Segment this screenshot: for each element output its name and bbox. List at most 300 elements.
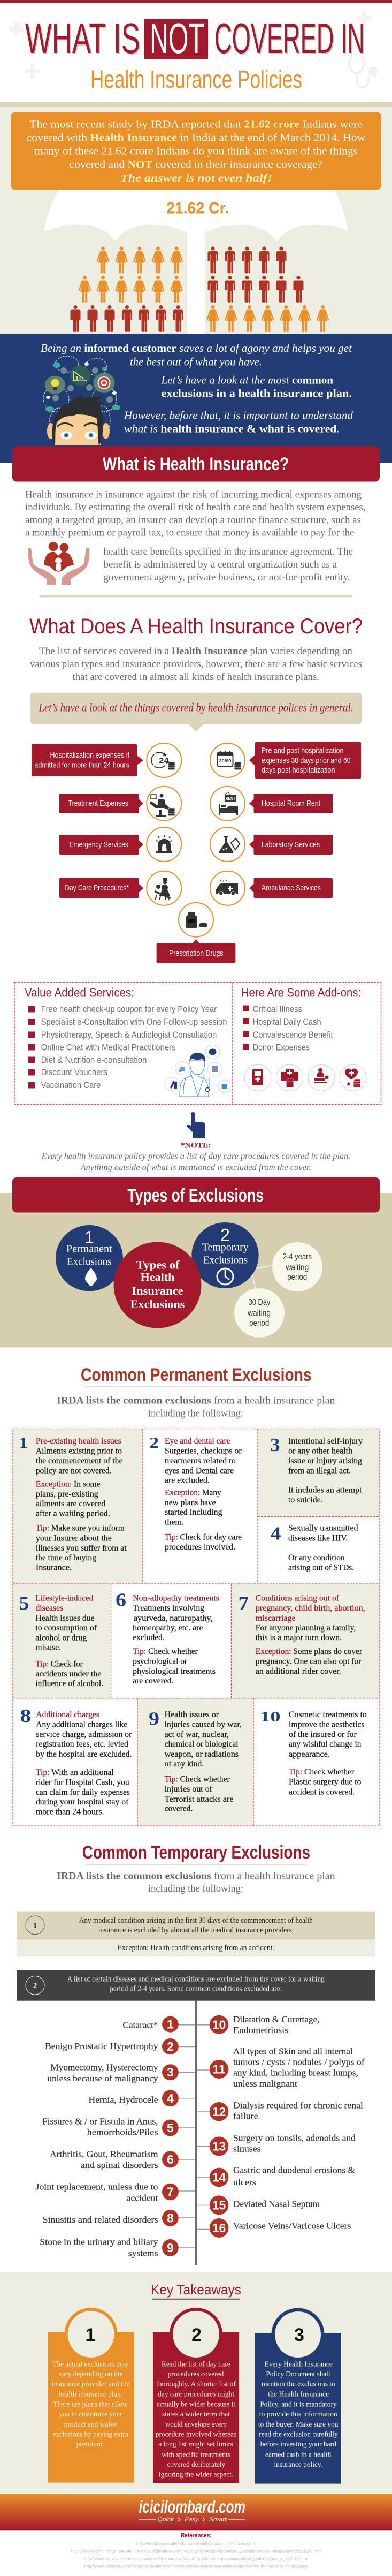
cell 6: non-allopathy treatments: physiological treatments [133, 1667, 216, 1676]
list: left conditions 1-9: hemorrhoids/Piles [87, 2127, 158, 2137]
references: http://www.moneycontrol.com/news/health-insurance/avoid-troublehealth-insurance-check-your-exclusions_767211.html [84, 2556, 308, 2561]
cell 5: lifestyle-induced diseases: to consumption of [35, 1623, 97, 1633]
list: left conditions 1-9: 7 [167, 2185, 174, 2199]
icon: ambulance [210, 871, 245, 905]
cell 8: additional charges: Additional charges [36, 1710, 99, 1719]
cell 7: pregnancy conditions: 7 [239, 1593, 249, 1614]
icon: day care people [147, 871, 181, 905]
cell 7: pregnancy conditions: pregnancy. One can also opt for [256, 1657, 362, 1666]
takeaway card 2: a long list might set limits [158, 2441, 233, 2449]
item: Prescription Drugs [157, 939, 235, 963]
band and background of intro section [0, 102, 392, 334]
cell 1: pre-existing health issues: 1 [19, 1435, 28, 1452]
cell 5: lifestyle-induced diseases [19, 1593, 103, 1688]
takeaway card 3: Policy, and it is mandatory [260, 2401, 337, 2408]
takeaway card 2: procedures covered [168, 2370, 224, 2378]
cell 7: pregnancy conditions: For anyone planning a family, [256, 1623, 356, 1633]
cell 4: sexually transmitted diseases: diseases like HIV. [288, 1533, 348, 1543]
text block: list of services: The list of services covered in a Health Insurance plan varies depending on [39, 646, 352, 657]
cell 2: eye and dental care: Exception: Many [165, 1488, 221, 1497]
oval: 2-4 years waiting period: 2-4 years [283, 1252, 312, 1261]
oval: 2-4 years waiting period: waiting [285, 1263, 309, 1272]
list: value added services: Free health check-up coupon for every Policy Year [41, 1004, 217, 1014]
cell 1: pre-existing health issues: your Insurer about the [36, 1533, 112, 1543]
icon: room rent bed: RENT [226, 796, 235, 801]
takeaway card 2: day care procedures might [158, 2390, 234, 2398]
text block: list of services [30, 646, 362, 683]
timeline axis [195, 2001, 197, 2265]
list: left conditions 1-9: and spinal disorders [81, 2160, 158, 2170]
list: add-ons [243, 1004, 333, 1053]
cell 6: non-allopathy treatments: Tip: Check whether [133, 1647, 198, 1656]
cell 2: eye and dental care: eyes and Dental care [165, 1466, 234, 1475]
takeaway card 3: Policy Document shall [266, 2370, 330, 2378]
panel: value added services and add-ons [14, 983, 381, 1104]
list: left conditions 1-9: Hernia, Hydrocele [89, 2095, 158, 2105]
takeaway card 1: 1 [86, 2325, 95, 2345]
cell 7: pregnancy conditions: Conditions arising out of [256, 1594, 340, 1603]
callout: things covered [30, 693, 362, 731]
circle: permanent exclusions: Exclusions [67, 1256, 112, 1268]
takeaway card 2: states a wider term that [162, 2411, 230, 2419]
list: left conditions 1-9: systems [128, 2248, 158, 2258]
cell 5: lifestyle-induced diseases: accidents under the [35, 1670, 101, 1679]
cell 3: intentional self-injury [270, 1434, 363, 1505]
cell 2: eye and dental care: Surgeries, checkups or [165, 1447, 242, 1455]
cell 10: cosmetic treatments: Plastic surgery due to [289, 1778, 362, 1787]
cell 10: cosmetic treatments: any wishful change in [289, 1740, 362, 1749]
list: right conditions 10-16: 15 [212, 2199, 226, 2212]
list: value added services: Online Chat with Medical Practitioners [41, 1042, 176, 1053]
panel: permanent exclusion grid backgrounds [13, 1429, 380, 1826]
cell 10: cosmetic treatments: 10 [260, 1709, 280, 1725]
takeaway card 3: the Health Insurance [268, 2390, 329, 2398]
cell 1: pre-existing health issues: Insurance. [36, 1563, 72, 1573]
list: value added services: Discount Vouchers [41, 1067, 107, 1077]
panel: waiting period list header [17, 1970, 375, 2001]
oval: 30 day waiting period: waiting [247, 1309, 271, 1318]
panel: waiting period list header: 2 [33, 1982, 37, 1990]
takeaway card 1 [48, 2308, 134, 2483]
footer banner [0, 2494, 392, 2530]
takeaway card 1: vary depending on the [58, 2370, 123, 2378]
cell 8: additional charges: during your hospital stay of [36, 1797, 129, 1807]
item: Laboratory Services [249, 835, 333, 855]
cell 1: pre-existing health issues: policy are not covered. [36, 1466, 112, 1475]
callout: study: covered and NOT covered in their insurance coverage? [70, 158, 322, 170]
cell 9: war and radiation: Health issues or [165, 1710, 219, 1719]
panel: informed customer [0, 334, 392, 463]
heading: Types of Exclusions: Types of Exclusions [127, 1185, 264, 1206]
cell 2: eye and dental care: are excluded. [165, 1476, 210, 1485]
illustration: doctor [165, 1045, 230, 1097]
circle: temporary exclusions: 2 [220, 1226, 230, 1245]
list: right conditions 10-16: any kind, including breast lumps, [233, 2068, 358, 2078]
footer banner: Easy [185, 2517, 199, 2523]
note [41, 1142, 350, 1173]
panel: waiting period list header: A list of certain diseases and medical conditions are excluded from the cover for a waiting [67, 1975, 325, 1984]
list: left conditions 1-9: Joint replacement, unless due to [35, 2182, 158, 2192]
circle: temporary exclusions: Exclusions [203, 1254, 248, 1266]
takeaway card 3: before investing your hard [260, 2441, 336, 2449]
people: right group [206, 246, 329, 332]
list: left conditions 1-9: Stone in the urinary and biliary [40, 2237, 158, 2247]
footer banner: Smart [209, 2517, 227, 2523]
list: right conditions 10-16: All types of Skin and all internal [233, 2046, 353, 2057]
cell 10: cosmetic treatments: improve the aesthetics [289, 1720, 365, 1729]
icon: laboratory flask [210, 827, 245, 862]
list: left conditions 1-9: 2 [167, 2039, 174, 2053]
intro text on blue: Being an informed customer saves a lot of agony and helps you get [41, 342, 352, 354]
illustration: thinking man [43, 356, 120, 447]
item: Day Care Procedures: Day Care Procedures* [65, 883, 129, 893]
intro text on blue: the best out of what you have. [130, 356, 262, 368]
references: http://health.howstuffworks.com/health-insurance/exclusion.htm [136, 2541, 256, 2547]
takeaway card 3: read the exclusion carefully [259, 2431, 338, 2438]
title: WHAT IS [26, 16, 141, 63]
callout: study: The answer is not even half! [120, 172, 272, 184]
list: value added services: Diet & Nutrition e-consultation [41, 1055, 147, 1065]
top red bar [0, 0, 392, 3]
takeaway card 3: mention the exclusions to [262, 2381, 335, 2389]
circle: types of health insurance exclusions: Health [141, 1270, 174, 1284]
item: Hospitalization expenses: admitted for more than 24 hours [34, 761, 129, 770]
takeaway card 2: with specific treatments [162, 2451, 230, 2459]
stat: 21.62 Cr.: 21.62 Cr. [166, 200, 229, 217]
list: right conditions 10-16: 13 [212, 2140, 226, 2154]
intro text on blue [41, 342, 353, 435]
cell 2: eye and dental care [149, 1435, 242, 1552]
list: left conditions 1-9: Arthritis, Gout, Rheumatism [50, 2149, 158, 2159]
item: Treatment Expenses: Treatment Expenses [68, 799, 128, 808]
takeaway card 1: exclusions by paying extra [53, 2431, 129, 2438]
item: Pre and post hospitalization: expenses 30 days prior and 60 [262, 756, 351, 765]
text block: health insurance definition: individuals. By estimating the overall risk of health care and health system expenses, [25, 502, 366, 513]
note: Anything outside of what is mentioned is excluded from the cover. [80, 1162, 311, 1173]
heading: Key Takeaways: Key Takeaways [151, 2282, 241, 2298]
list: left conditions 1-9: 8 [167, 2211, 174, 2225]
cell 4: sexually transmitted diseases: Sexually transmitted [288, 1524, 358, 1533]
item: Emergency Services: Emergency Services [70, 840, 128, 849]
oval: 2-4 years waiting period [272, 1242, 322, 1291]
takeaway card 2 [153, 2308, 239, 2483]
circle: types of health insurance exclusions: Insurance [132, 1284, 183, 1297]
panel: key takeaways background [0, 2272, 392, 2493]
note: Every health insurance policy provides a list of day care procedures covered in the plan. [41, 1151, 350, 1161]
list: right conditions 10-16: Dialysis required for chronic renal [233, 2100, 363, 2110]
divider [40, 595, 352, 598]
intro text on blue: However, before that, it is important to understand [124, 409, 353, 421]
list: left conditions 1-9: Cataract* [123, 2020, 158, 2030]
heading: Types of Exclusions [12, 1177, 380, 1212]
takeaway card 2: 2 [191, 2325, 202, 2345]
title: WHAT IS [25, 14, 140, 62]
text block: health insurance definition: government agency, private business, or not-for-profit entity. [104, 572, 350, 583]
circle: temporary exclusions: Temporary [202, 1242, 249, 1253]
connector lines [252, 1265, 274, 1289]
cell 8: additional charges: more than 24 hours. [36, 1808, 104, 1817]
panel: first 30 days exclusion: Exception: Health conditions arising from an accident. [118, 1944, 274, 1952]
footer banner: Quick [157, 2517, 174, 2523]
list: add-ons: Convalescence Benefit [253, 1030, 333, 1040]
cell 6: non-allopathy treatments [116, 1590, 219, 1686]
icons: add-ons [244, 1064, 366, 1091]
list: right conditions 10-16: failure [233, 2111, 258, 2121]
text block: health insurance definition: Health insurance is insurance against the risk of incurring medical expenses among [25, 489, 362, 500]
references [71, 2533, 321, 2569]
list: value added services [28, 1004, 227, 1090]
cell 10: cosmetic treatments: accident is covered. [289, 1787, 355, 1796]
cell 5: lifestyle-induced diseases: Health issues due [35, 1614, 95, 1623]
cell 9: war and radiation: chemical or biological [165, 1740, 239, 1749]
cell 4: sexually transmitted diseases: 4 [271, 1523, 281, 1544]
grid dashed lines [13, 1429, 380, 1826]
icon: family in hands [28, 542, 89, 585]
list: right conditions 10-16: unless malignant [233, 2079, 297, 2089]
icon: treatment chair [147, 787, 181, 821]
cell 9: war and radiation: act of war, nuclear, [165, 1730, 229, 1739]
list: left conditions 1-9: Myomectomy, Hysterectomy [50, 2063, 158, 2073]
text block: IRDA lists temporary: including the following: [148, 1883, 243, 1894]
cell 1: pre-existing health issues: the commencement of the [36, 1456, 123, 1465]
takeaway card 2: would envelope every [165, 2421, 227, 2429]
cell 9: war and radiation [149, 1708, 242, 1814]
takeaway card 2: ignoring the wider aspect. [159, 2471, 233, 2479]
list: right conditions 10-16 [210, 2014, 365, 2238]
cell 1: pre-existing health issues: Exception: In some [36, 1479, 101, 1489]
list: right conditions 10-16: 14 [212, 2171, 226, 2185]
cell 6: non-allopathy treatments: 6 [116, 1590, 126, 1611]
cell 9: war and radiation: injuries caused by war, [165, 1720, 242, 1729]
cell 4: sexually transmitted diseases: arising out of STDs. [288, 1563, 354, 1573]
takeaway card 3: insurance policy. [274, 2461, 322, 2469]
list: left conditions 1-9: 3 [167, 2065, 174, 2079]
panel: first 30 days exclusion: 1 [33, 1921, 37, 1930]
cell 5: lifestyle-induced diseases: alcohol or drug [35, 1633, 87, 1643]
takeaway card 2: procedure involved whereas [156, 2431, 236, 2438]
cell 2: eye and dental care: procedures involved. [165, 1543, 235, 1552]
cell 9: war and radiation: injuries out of [165, 1785, 213, 1794]
item: Prescription Drugs: Prescription Drugs [169, 949, 224, 958]
item: Hospitalization expenses [32, 744, 143, 776]
list: right conditions 10-16: Deviated Nasal Septum [233, 2199, 320, 2209]
icon: pointing hand [187, 1112, 205, 1138]
cell 1: pre-existing health issues: Pre-existing health issues [36, 1437, 121, 1446]
references: http://www.icicibank.com/Personal-Banking/insurance/general-insurance/health-insurance/health-insurance-claims.page [84, 2563, 308, 2569]
list: right conditions 10-16: Dilatation & Curettage, [233, 2014, 320, 2024]
list: right conditions 10-16: Endometriosis [233, 2025, 288, 2035]
cell 1: pre-existing health issues: the time of buying [36, 1553, 96, 1562]
cell 3: intentional self-injury: to suicide. [288, 1495, 323, 1505]
takeaway card 3: to the buyer. Make sure you [258, 2421, 338, 2429]
heading: value added services: Value Added Services: [25, 985, 134, 999]
heading: What is Health Insurance?: What is Health Insurance? [103, 454, 289, 474]
text block: health insurance definition: among a targeted group, an insurer can develop a routine finance structure, such as [25, 515, 361, 526]
cell 1: pre-existing health issues: plans, pre-existing [36, 1490, 98, 1499]
cell 6: non-allopathy treatments: Non-allopathy treatments [133, 1594, 219, 1603]
cell 3: intentional self-injury: from an illegal act. [288, 1466, 351, 1475]
intro text on blue: what is health insurance & what is covered . [124, 422, 340, 435]
heading: add-ons: Here Are Some Add-ons: [241, 985, 361, 999]
subtitle: Health Insurance Policies [90, 65, 302, 93]
list: left conditions 1-9: Benign Prostatic Hypertrophy [45, 2041, 158, 2051]
list: right conditions 10-16: 11 [212, 2063, 226, 2076]
takeaway card 2: Read the list of day care [162, 2360, 230, 2368]
icon: room rent bed [210, 787, 245, 821]
cell 10: cosmetic treatments: appearance. [289, 1750, 330, 1759]
text block: IRDA lists permanent [57, 1395, 335, 1419]
list: right conditions 10-16: Gastric and duodenal erosions & [233, 2165, 355, 2175]
cell 9: war and radiation: of any kind. [165, 1759, 204, 1769]
text block: IRDA lists temporary: IRDA lists the common exclusions from a health insurance plan [57, 1871, 335, 1882]
cell 8: additional charges: Any additional charges like [36, 1720, 127, 1729]
icon: 30/60 calendar [210, 743, 245, 777]
cell 10: cosmetic treatments: Cosmetic treatments to [289, 1710, 367, 1719]
list: value added services: Physiotherapy, Speech & Audiologist Consultation [41, 1030, 217, 1040]
oval: 30 day waiting period: period [249, 1319, 269, 1328]
item: Hospitalization expenses: Hospitalization expenses if [50, 751, 130, 760]
cell 1: pre-existing health issues: illnesses you suffer from at [36, 1544, 127, 1553]
takeaway card 2: actually be wider because it [157, 2401, 235, 2408]
list: right conditions 10-16: sinuses [233, 2144, 261, 2154]
references: References: [181, 2533, 212, 2539]
cell 8: additional charges: Tip: With an additional [36, 1768, 114, 1777]
circle: permanent exclusions [56, 1225, 123, 1291]
callout: study [11, 112, 381, 190]
takeaway card 3: earned cash in a health [265, 2451, 331, 2459]
cell 4: sexually transmitted diseases [271, 1523, 358, 1573]
decorative header icons [9, 11, 376, 87]
oval: 30 day waiting period: 30 Day [249, 1298, 271, 1307]
takeaway card 3: to provide this information [259, 2411, 337, 2419]
cell 5: lifestyle-induced diseases: influence of alcohol. [35, 1679, 103, 1688]
timeline connectors [178, 2025, 210, 2248]
list: left conditions 1-9: 4 [167, 2091, 174, 2105]
circle: types of health insurance exclusions [113, 1242, 201, 1328]
intro text on blue: Let’s have a look at the most common [160, 373, 333, 386]
item: Pre and post hospitalization: Pre and post hospitalization [262, 746, 343, 755]
panel: first 30 days exclusion [17, 1912, 375, 1956]
cell 7: pregnancy conditions [239, 1593, 365, 1676]
cell 6: non-allopathy treatments: psychological or [133, 1657, 188, 1666]
list: value added services: Specialist e-Consultation with One Follow-up session [41, 1017, 227, 1027]
cell 10: cosmetic treatments [260, 1709, 367, 1796]
list: left conditions 1-9: 1 [167, 2018, 174, 2031]
takeaway card 1: insurance provider and the [52, 2381, 130, 2389]
panel: types of exclusions background [0, 1193, 392, 1347]
item: Treatment Expenses [59, 794, 143, 813]
icon: emergency siren [147, 827, 181, 862]
cell 3: intentional self-injury: 3 [270, 1434, 280, 1455]
item: Day Care Procedures [59, 878, 143, 898]
circle: permanent exclusions: Permanent [66, 1243, 112, 1255]
circle: permanent exclusions: 1 [84, 1227, 94, 1247]
cell 8: additional charges [20, 1705, 132, 1817]
list: right conditions 10-16: Surgery on tonsils, adenoids and [233, 2133, 356, 2143]
cell 7: pregnancy conditions: pregnancy, child birth, abortion, [256, 1604, 365, 1613]
title: NOT [150, 14, 204, 62]
note: *NOTE: [181, 1142, 211, 1150]
list: right conditions 10-16: Varicose Veins/Varicose Ulcers [233, 2221, 351, 2231]
cell 4: sexually transmitted diseases: Or any condition [288, 1553, 345, 1562]
list: right conditions 10-16: ulcers [233, 2177, 256, 2187]
cell 2: eye and dental care: treatments related to [165, 1456, 236, 1465]
list: right conditions 10-16: 10 [212, 2018, 226, 2031]
list: left conditions 1-9: accident [127, 2193, 158, 2203]
takeaway card 1: product and waive [64, 2421, 117, 2429]
cell 5: lifestyle-induced diseases: Lifestyle-induced [35, 1594, 94, 1603]
text block: health insurance definition: health care benefits specified in the insurance agreement. The [104, 546, 353, 557]
item: Pre and post hospitalization [249, 742, 361, 779]
cell 6: non-allopathy treatments: are covered. [133, 1676, 173, 1686]
item: Hospital Room Rent [249, 794, 333, 813]
heading: What is Health Insurance? [12, 447, 380, 482]
callout: study: covered with Health Insurance in India at the end of March 2014. How [27, 132, 366, 143]
takeaway card 2: covered deliberately [167, 2461, 225, 2469]
text block: list of services: various plan types and insurance providers, however, there are a few basic services [30, 659, 362, 670]
cell 1: pre-existing health issues: after a waiting period. [36, 1509, 110, 1519]
cell 2: eye and dental care: 2 [149, 1435, 159, 1452]
heading: Common Temporary Exclusions: Common Temporary Exclusions [82, 1842, 310, 1863]
takeaway card 1: The actual exclusions may [52, 2360, 128, 2368]
list: left conditions 1-9: Fissures & / or Fistula in Anus, [42, 2116, 158, 2126]
takeaway card 1: premium. [76, 2441, 104, 2449]
footer banner: icicilombard.com [139, 2497, 245, 2517]
cell 1: pre-existing health issues: Ailments existing prior to [36, 1447, 122, 1455]
cell 5: lifestyle-induced diseases: diseases [35, 1604, 63, 1613]
cell 3: intentional self-injury: Intentional self-injury [288, 1437, 363, 1446]
list: add-ons: Critical Illness [253, 1004, 302, 1014]
list: right conditions 10-16: 12 [212, 2105, 226, 2119]
text block: IRDA lists temporary [57, 1871, 335, 1894]
text block: health insurance definition [25, 489, 366, 583]
icon: prescription pills [179, 866, 392, 937]
text block: list of services: that are covered in almost all kinds of health insurance plans. [73, 671, 319, 683]
list: left conditions 1-9: 6 [167, 2152, 174, 2166]
takeaway card 3: Every Health Insurance [265, 2360, 333, 2368]
cell 6: non-allopathy treatments: homeopathy, etc. are [133, 1623, 203, 1633]
cell 8: additional charges: by the hospital are excluded. [36, 1750, 132, 1759]
cell 5: lifestyle-induced diseases: misuse. [35, 1643, 61, 1652]
circle: types of health insurance exclusions: Exclusions [130, 1297, 185, 1311]
list: add-ons: Hospital Daily Cash [253, 1017, 321, 1027]
cell 9: war and radiation: Terrorist attacks are [165, 1795, 234, 1804]
list: left conditions 1-9: Sinusitis and related disorders [43, 2215, 158, 2225]
list: left conditions 1-9: unless because of malignancy [47, 2073, 158, 2083]
takeaway card 1: you to customize your [59, 2411, 122, 2419]
icon: 24 hours [147, 743, 181, 777]
title [25, 14, 366, 63]
list: left conditions 1-9 [35, 2016, 179, 2258]
takeaway card 3 [255, 2308, 341, 2484]
list: add-ons: Donor Expenses [253, 1042, 310, 1053]
cell 3: intentional self-injury: or any other health [288, 1447, 352, 1455]
cell 1: pre-existing health issues [19, 1435, 127, 1573]
cell 9: war and radiation: Tip: Check whether [165, 1774, 230, 1784]
cell 5: lifestyle-induced diseases: Tip: Check for [35, 1659, 83, 1668]
item: Pre and post hospitalization: days post hospitalization [262, 766, 335, 775]
text block: health insurance definition: a monthly premium or payroll tax, to ensure that money is available to pay for the [25, 527, 354, 539]
panel: first 30 days exclusion: Any medical condition arising in the first 30 days of the commencement of health [79, 1916, 313, 1925]
cell 10: cosmetic treatments: Tip: Check whether [289, 1767, 355, 1777]
icon: 24 hours: 24 [159, 756, 169, 765]
people: left group [71, 246, 183, 332]
cell 7: pregnancy conditions: miscarriage [256, 1614, 296, 1623]
list: right conditions 10-16: tumors / cysts / nodules / polyps of [233, 2057, 365, 2067]
heading: Common Permanent Exclusions: Common Permanent Exclusions [81, 1365, 311, 1385]
list: left conditions 1-9: 5 [167, 2121, 174, 2135]
cell 2: eye and dental care: Tip: Check for day care [165, 1532, 242, 1542]
